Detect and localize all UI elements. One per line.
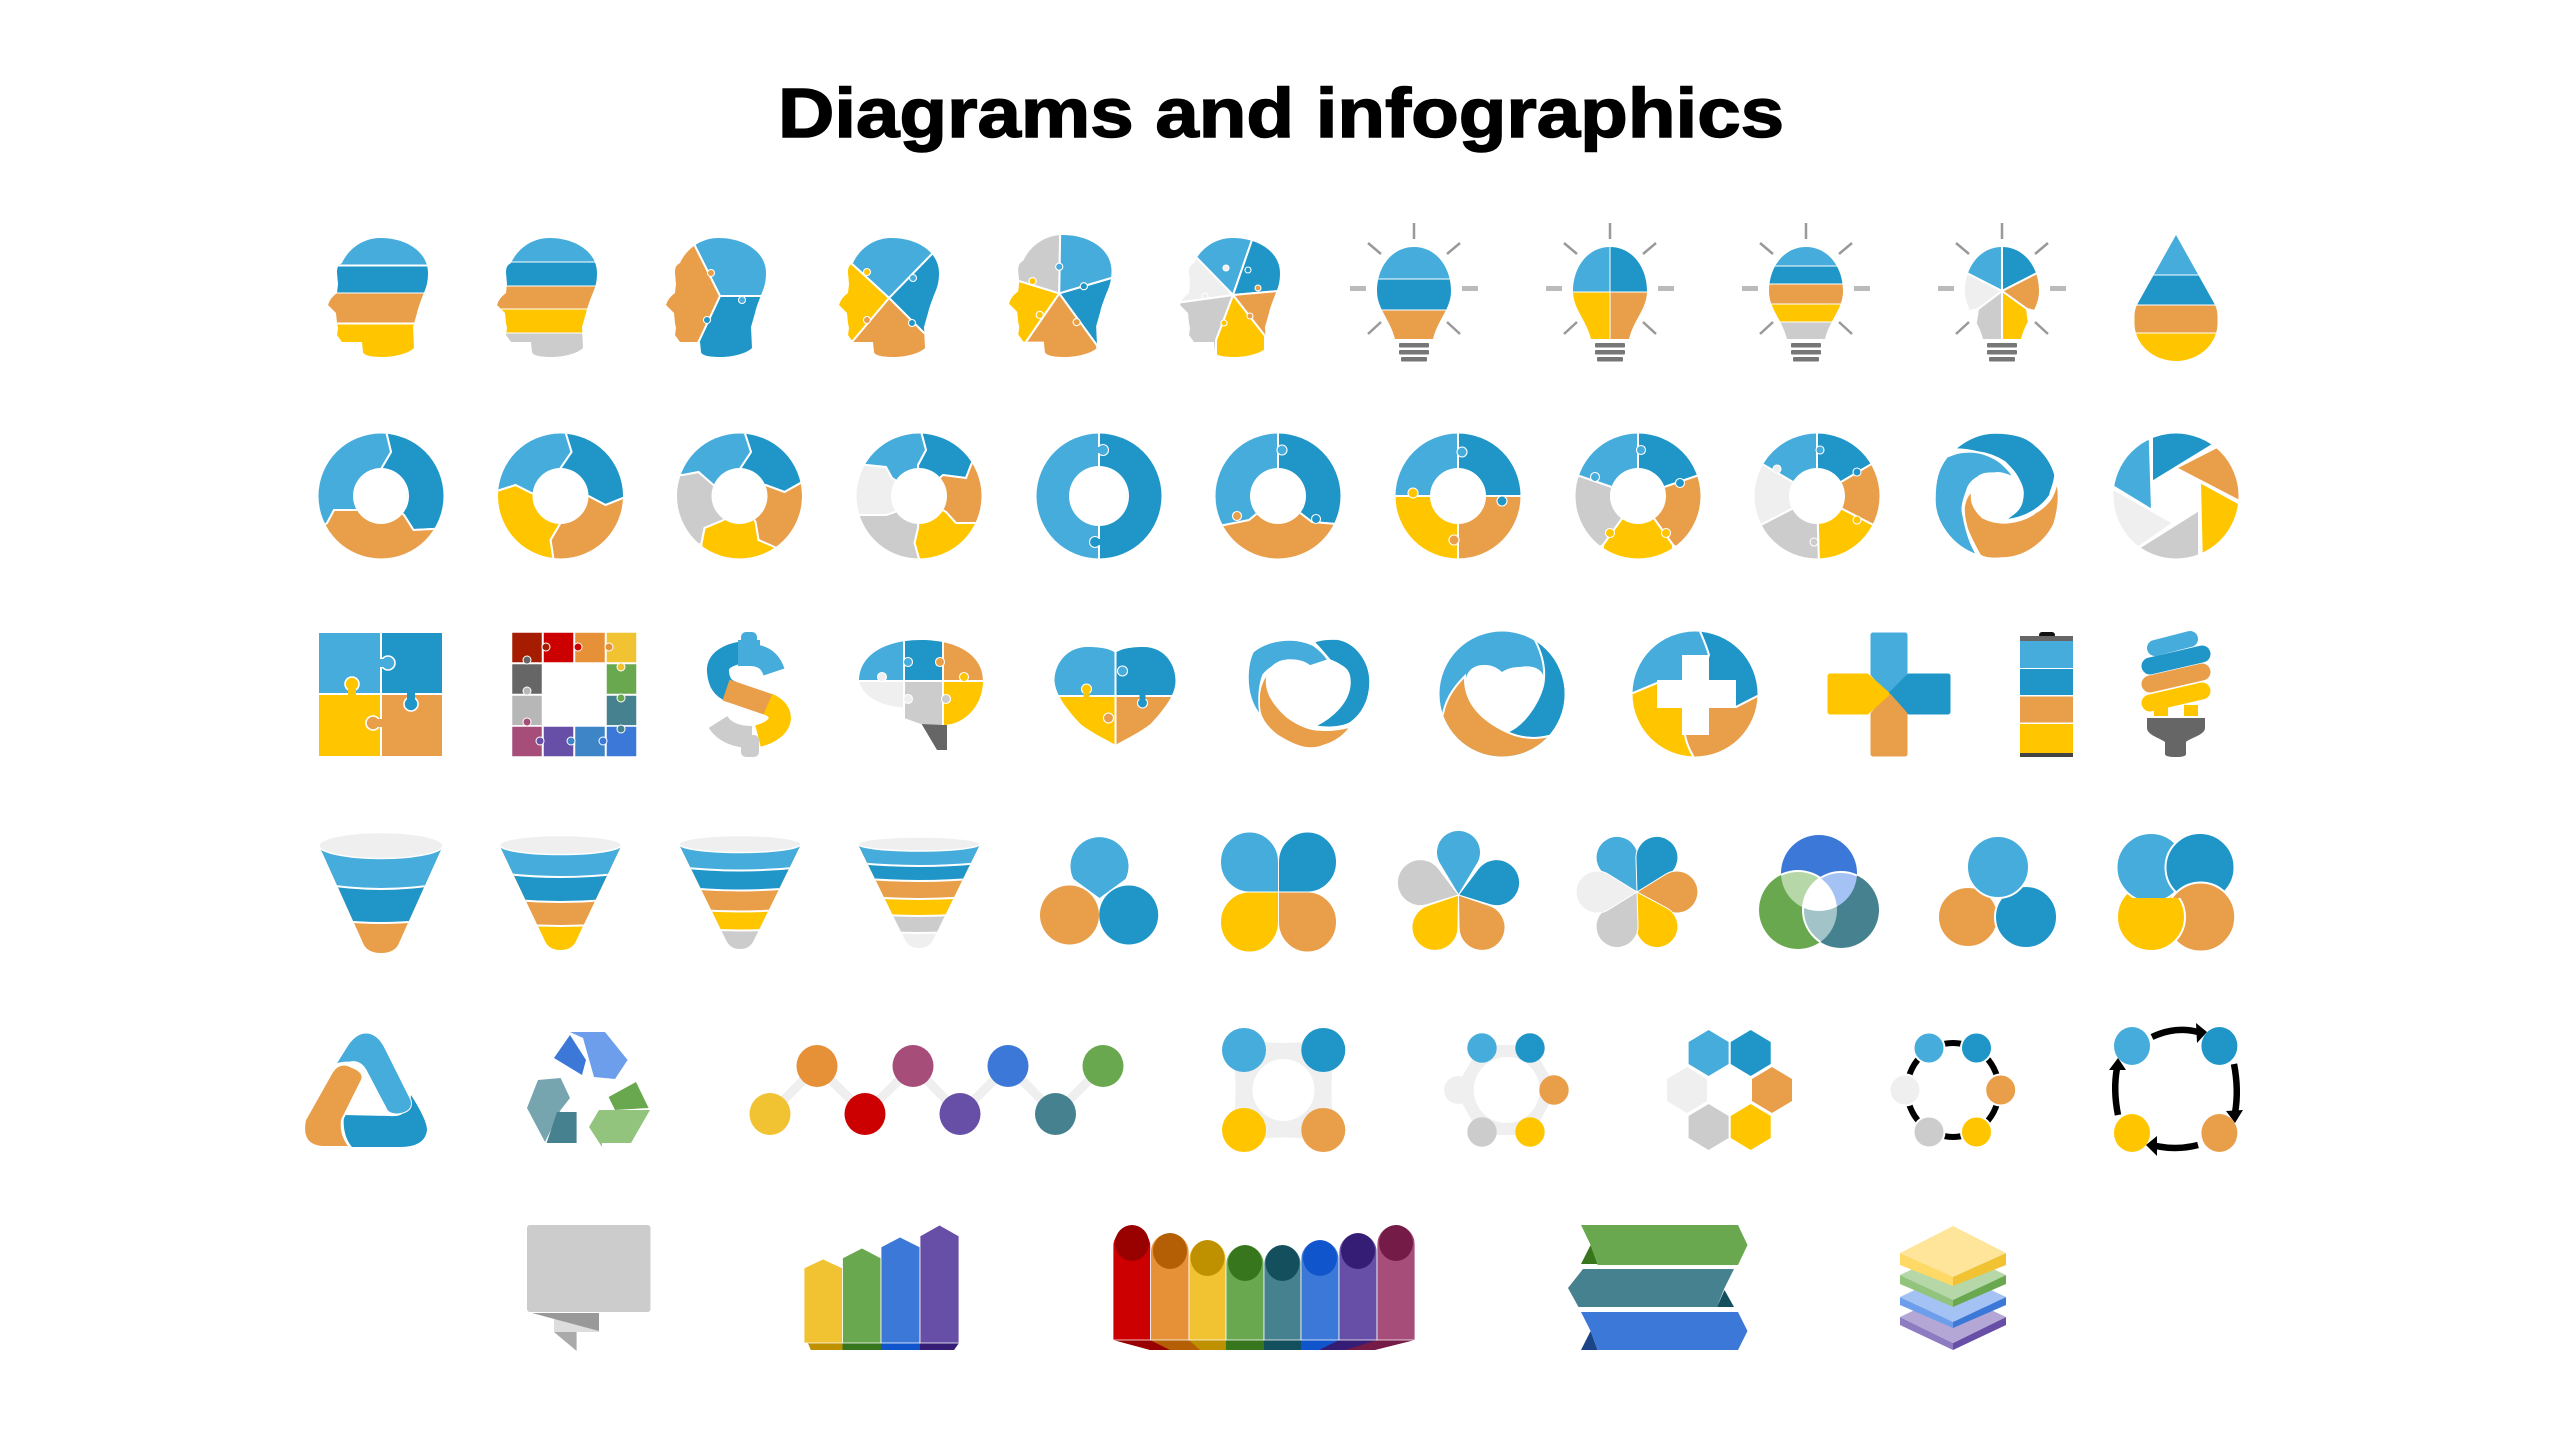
icon: puzzle square four pieces [318, 632, 443, 757]
icon: three petals [1040, 837, 1158, 944]
icon: donut puzzle six pieces [1754, 434, 1880, 558]
icon: isometric layer stack [1900, 1226, 2006, 1350]
icon: bulb five bands [1742, 223, 1870, 362]
icon: rainbow capsule bars [1113, 1225, 1415, 1350]
icon: disc with medical cross [1632, 632, 1758, 756]
icon: four nodes with arrow cycle [2109, 1023, 2243, 1156]
icon: head puzzle four pieces [839, 238, 939, 357]
icon: donut five arrows [677, 434, 802, 558]
icon: heart swirl [1248, 639, 1370, 748]
icon: donut puzzle five pieces [1576, 434, 1700, 558]
icon: funnel six levels [858, 838, 980, 948]
icon: bulb six sectors [1938, 223, 2066, 362]
icon: head puzzle three pieces [666, 238, 766, 357]
icon: heart puzzle [1054, 647, 1176, 745]
icon: funnel three levels [320, 834, 442, 953]
icon: funnel four levels [500, 836, 620, 950]
icon: hexagon cluster [1667, 1030, 1792, 1150]
icon: funnel five levels [680, 836, 800, 949]
icon: triangle loop [304, 1033, 427, 1147]
icon: dollar sign puzzle [718, 632, 780, 757]
icon: three interlocked circles [1938, 836, 2057, 948]
icon: swirl three pieces [1935, 433, 2058, 558]
icon: head with five bands [497, 238, 597, 357]
icon: head with four bands [328, 238, 428, 357]
icon: donut puzzle two pieces [1036, 434, 1162, 558]
icon: six petals [1576, 829, 1698, 955]
icon: aperture six blades [2114, 434, 2238, 558]
icon: recycling arrows [527, 1032, 650, 1147]
icon: folded paper banner [527, 1225, 650, 1351]
icon: four nodes on square [1222, 1028, 1345, 1152]
icon: battery [2020, 632, 2073, 757]
infographic canvas [305, 86, 2243, 1351]
icon: venn three circles [1759, 835, 1879, 949]
icon: water drop bands [2134, 235, 2218, 361]
icon: bulb four quarters [1546, 223, 1674, 362]
icon: donut puzzle four pieces [1396, 434, 1520, 558]
icon: four petals [1220, 832, 1336, 952]
icon: six nodes on ring [1444, 1033, 1569, 1147]
icon: zigzag ribbon [1568, 1225, 1748, 1350]
icon: donut puzzle three pieces [1216, 434, 1340, 558]
icon: puzzle ring twelve pieces [512, 632, 637, 757]
icon: brain puzzle [859, 640, 983, 750]
icon: four interlocked circles [2116, 833, 2235, 952]
icon: head puzzle six pieces [1180, 238, 1280, 357]
title: Diagrams and infographics [778, 74, 1784, 152]
icon: head puzzle five pieces [1009, 235, 1112, 357]
icon: five petals [1391, 830, 1526, 960]
icon: spiral lamp [2147, 639, 2205, 757]
icon: donut four arrows [498, 434, 623, 558]
icon: six nodes with black ring [1890, 1032, 2016, 1148]
icon: disc with heart cutout [1440, 632, 1564, 756]
icon: bulb two bands [1350, 223, 1478, 362]
icon: donut six arrows [856, 434, 982, 558]
icon: ascending arrow bars [804, 1225, 959, 1350]
icon: zigzag molecule [750, 1045, 1124, 1135]
icon: donut three arrows [318, 434, 444, 558]
icon: plus four arrows [1830, 635, 1948, 754]
